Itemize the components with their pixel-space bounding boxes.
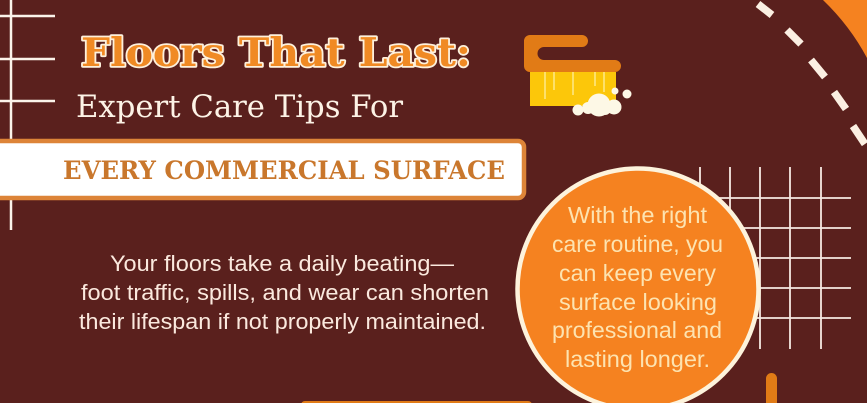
intro paragraph: Your floors take a daily beating— xyxy=(110,251,455,276)
intro paragraph xyxy=(79,251,489,334)
bottom panel edge xyxy=(301,401,532,403)
callout text: surface looking xyxy=(559,289,717,315)
callout text xyxy=(552,202,723,372)
corner arc xyxy=(823,0,867,58)
dashed arc xyxy=(758,4,865,144)
intro paragraph: their lifespan if not properly maintained. xyxy=(79,309,486,334)
intro paragraph: foot traffic, spills, and wear can shorten xyxy=(81,280,489,305)
callout text: With the right xyxy=(568,202,708,228)
left grid lines xyxy=(0,0,55,230)
callout text: care routine, you xyxy=(552,231,723,257)
callout text: professional and xyxy=(552,317,722,343)
subtitle: Expert Care Tips For xyxy=(76,89,403,125)
banner text: EVERY COMMERCIAL SURFACE xyxy=(63,156,505,185)
orange bar accent xyxy=(766,373,777,403)
banner xyxy=(0,141,524,198)
callout text: lasting longer. xyxy=(565,346,710,372)
callout text: can keep every xyxy=(559,260,716,286)
right grid lines xyxy=(640,167,851,349)
icon: scrub brush xyxy=(524,35,632,116)
title: Floors That Last: xyxy=(81,30,471,76)
callout circle xyxy=(518,168,758,403)
